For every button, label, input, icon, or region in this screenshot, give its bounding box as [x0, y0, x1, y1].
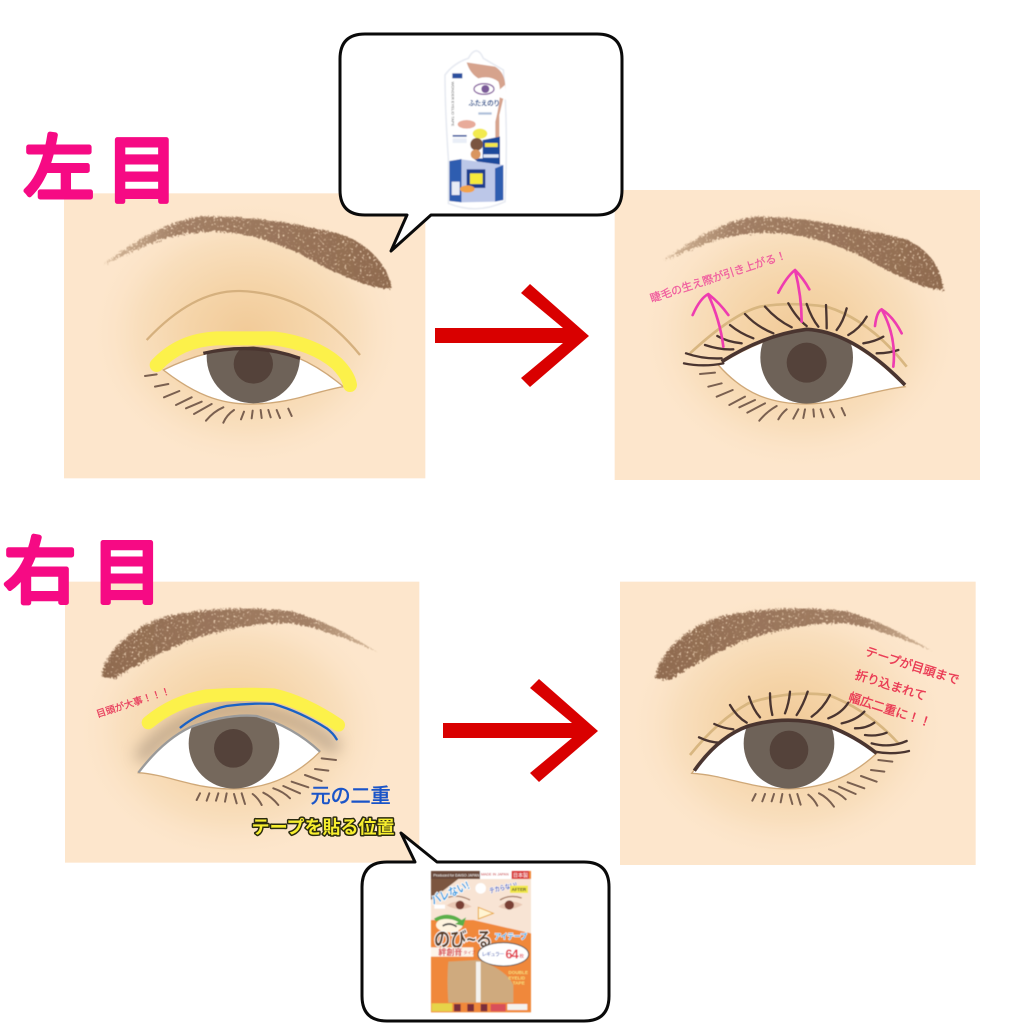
- title: right eye: 右: [4, 533, 76, 613]
- panel: left eye before: [64, 193, 425, 478]
- lower lashes: [197, 758, 336, 805]
- pink lift arrows: [693, 270, 902, 367]
- product: stretch eyelid tape package: EYELID: [508, 975, 526, 980]
- eyebrow: [663, 217, 943, 290]
- product: stretch eyelid tape package: アイテープ: [494, 932, 528, 941]
- arrow: bottom: [443, 679, 598, 782]
- product: stretch eyelid tape package: のび~る: [434, 929, 492, 951]
- lower lashes: [145, 374, 292, 423]
- title: right eye: 目: [92, 534, 162, 612]
- product: stretch eyelid tape package: DOUBLE: [508, 970, 528, 975]
- title: right eye: [4, 533, 162, 613]
- lower lashes: [700, 373, 845, 421]
- annotation text: 折り込まれて: [853, 667, 928, 703]
- yellow tape line: [157, 338, 350, 385]
- product: eyelid tape package: WONDER EYELID TAPE: [450, 82, 455, 127]
- product: stretch eyelid tape package: 絆創膏: [438, 947, 462, 957]
- callout: bottom product: [362, 833, 609, 1021]
- eyelid crease: [147, 291, 360, 355]
- annotation: inner corner: 目頭が大事！！！: [95, 685, 172, 721]
- annotation text: テープが目頭まで: [863, 644, 961, 687]
- blue original crease: [181, 704, 337, 739]
- product: eyelid tape package: [445, 51, 507, 209]
- panel: left eye after: [615, 190, 980, 480]
- label: tape position: テープを貼る位置: [252, 817, 394, 837]
- upper lashes: [699, 692, 909, 753]
- product: stretch eyelid tape package: 日本製: [513, 872, 528, 879]
- product: stretch eyelid tape package: [429, 871, 531, 1012]
- product: stretch eyelid tape package: Produced for DAISO JAPAN: [433, 873, 480, 877]
- annotation text: 睫毛の生え際が引き上がる！: [648, 248, 788, 305]
- eyelid crease: [690, 694, 898, 755]
- title: left eye: 目: [106, 132, 178, 212]
- product: stretch eyelid tape package: 枚: [519, 952, 524, 959]
- annotation text: 幅広二重に！！: [847, 689, 933, 730]
- product: stretch eyelid tape package: TAPE: [513, 981, 525, 986]
- eye: [137, 714, 321, 790]
- upper lashes: [684, 303, 898, 365]
- product: stretch eyelid tape package: AFTER: [512, 887, 527, 892]
- lid shadow: [140, 708, 337, 760]
- eye: [162, 346, 344, 405]
- lower lashes: [752, 760, 892, 807]
- eyelid crease: [690, 304, 907, 367]
- arrow: top: [435, 284, 589, 387]
- eye: [718, 328, 906, 405]
- eyebrow: [103, 216, 392, 289]
- product: stretch eyelid tape package: MADE IN JAPAN: [481, 873, 509, 877]
- callout: top product: [340, 34, 622, 251]
- product: stretch eyelid tape package: タイプ: [463, 949, 475, 955]
- product: stretch eyelid tape package: 64: [505, 948, 519, 962]
- eyebrow: [102, 608, 377, 678]
- title: left eye: 左: [24, 130, 94, 208]
- yellow tape line: [148, 694, 338, 725]
- label: original crease: 元の二重: [311, 785, 391, 808]
- eyebrow: [655, 608, 932, 680]
- product: stretch eyelid tape package: バレない!: [429, 879, 472, 907]
- eye: [690, 718, 878, 790]
- product: stretch eyelid tape package: レギュラー: [482, 952, 504, 958]
- product: eyelid tape package: ふたえのり: [468, 99, 500, 108]
- title: left eye: [24, 130, 178, 212]
- panel: right eye before: [65, 582, 419, 863]
- annotation text: [847, 644, 961, 730]
- panel: right eye after: [620, 582, 976, 865]
- product: stretch eyelid tape package: テカらない!: [488, 880, 518, 895]
